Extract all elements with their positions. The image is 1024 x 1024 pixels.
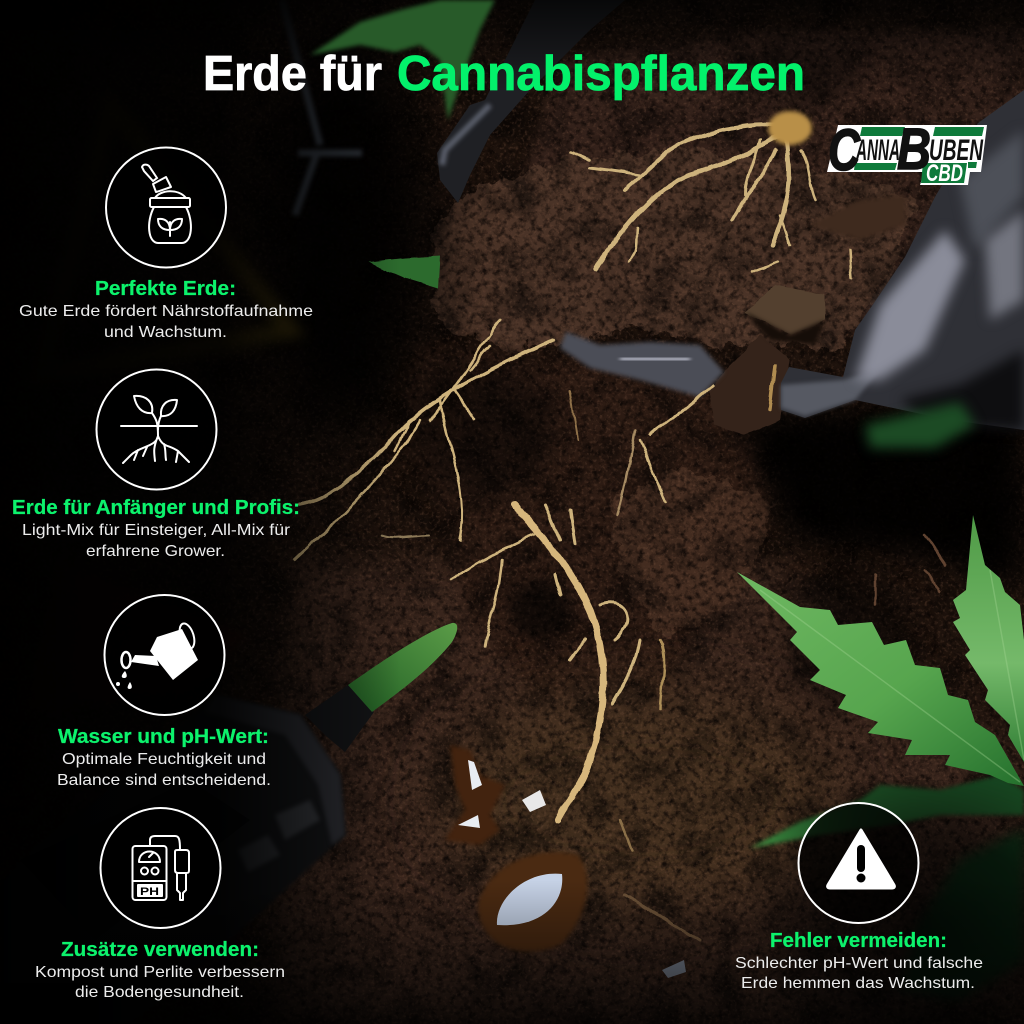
text block (22, 522, 291, 560)
heading: Perfekte Erde: (95, 278, 236, 300)
icon: sack with trowel (106, 148, 226, 268)
top left bag (437, 0, 625, 203)
shadows on soil (255, 20, 1024, 710)
grain lumps (300, 38, 1024, 1016)
text block: Schlechter pH-Wert und falsche (735, 955, 983, 972)
middle tube (560, 332, 724, 397)
panel: Zusätze verwenden (35, 808, 285, 1001)
icon: pH meter (100, 808, 220, 928)
panel: Perfekte Erde (19, 148, 313, 341)
text block: Erde hemmen das Wachstum. (741, 975, 975, 992)
background photo: soil, roots, bag, leaves (222, 0, 1024, 1024)
roots (295, 125, 945, 940)
icon: seedling with roots (96, 370, 216, 490)
panel: Erde für Anfänger und Profis (12, 370, 300, 560)
icon: watering can (104, 595, 224, 715)
text block (19, 303, 313, 341)
bright ground (479, 680, 808, 894)
water puddles (445, 745, 686, 978)
text block: die Bodengesundheit. (75, 984, 244, 1001)
text block: Balance sind entscheidend. (57, 772, 271, 789)
soil column below mound (414, 348, 765, 686)
heading: Zusätze verwenden: (61, 939, 259, 961)
grain dark (272, 26, 1024, 1018)
garden tool background (288, 24, 364, 216)
text block (35, 964, 285, 1001)
text block: Kompost und Perlite verbessern (35, 964, 285, 981)
title (203, 47, 805, 101)
middle root (300, 340, 553, 505)
soil ground lower (260, 560, 1024, 1024)
text block: Optimale Feuchtigkeit und (62, 751, 266, 768)
warning signs blurred (244, 272, 302, 342)
top leaf (310, 0, 495, 120)
icon: pH meter: PH (140, 886, 159, 898)
icon: warning triangle (798, 803, 918, 923)
text block: erfahrene Grower. (86, 543, 225, 560)
logo: CannaBuben CBD: ANNA (855, 134, 900, 167)
green reflection on bag (865, 402, 975, 448)
text block: und Wachstum. (104, 324, 227, 341)
logo: CannaBuben CBD: UBEN (929, 134, 984, 167)
heading: Fehler vermeiden: (770, 930, 947, 952)
logo: CannaBuben CBD: B (897, 117, 931, 182)
text block: Light-Mix für Einsteiger, All-Mix für (22, 522, 291, 539)
heading: Wasser und pH-Wert: (58, 726, 269, 748)
grain light (241, 0, 1024, 1024)
logo: CannaBuben CBD (827, 117, 987, 187)
cannabis leaf, bottom right (737, 515, 1024, 1000)
text block (735, 955, 983, 992)
panel: Wasser und pH-Wert (57, 595, 271, 789)
soil meter (234, 622, 458, 901)
small leaf (368, 256, 440, 288)
title: Erde für (203, 47, 382, 101)
heading: Erde für Anfänger und Profis: (12, 497, 300, 519)
logo: CannaBuben CBD: C (828, 118, 861, 183)
soil clod and stones (708, 195, 905, 435)
text block (57, 751, 271, 789)
soil mound (428, 150, 915, 350)
text block: Gute Erde fördert Nährstoffaufnahme (19, 303, 313, 320)
soil upper right (500, 30, 1024, 340)
right clod column (610, 470, 780, 640)
top root crown (625, 125, 795, 190)
lower root (515, 505, 603, 820)
title: Cannabispflanzen (397, 47, 805, 101)
root crown bulb (768, 111, 812, 145)
right bag (781, 90, 1024, 430)
panel: Fehler vermeiden (735, 803, 983, 992)
logo: CannaBuben CBD: CBD (926, 160, 963, 187)
